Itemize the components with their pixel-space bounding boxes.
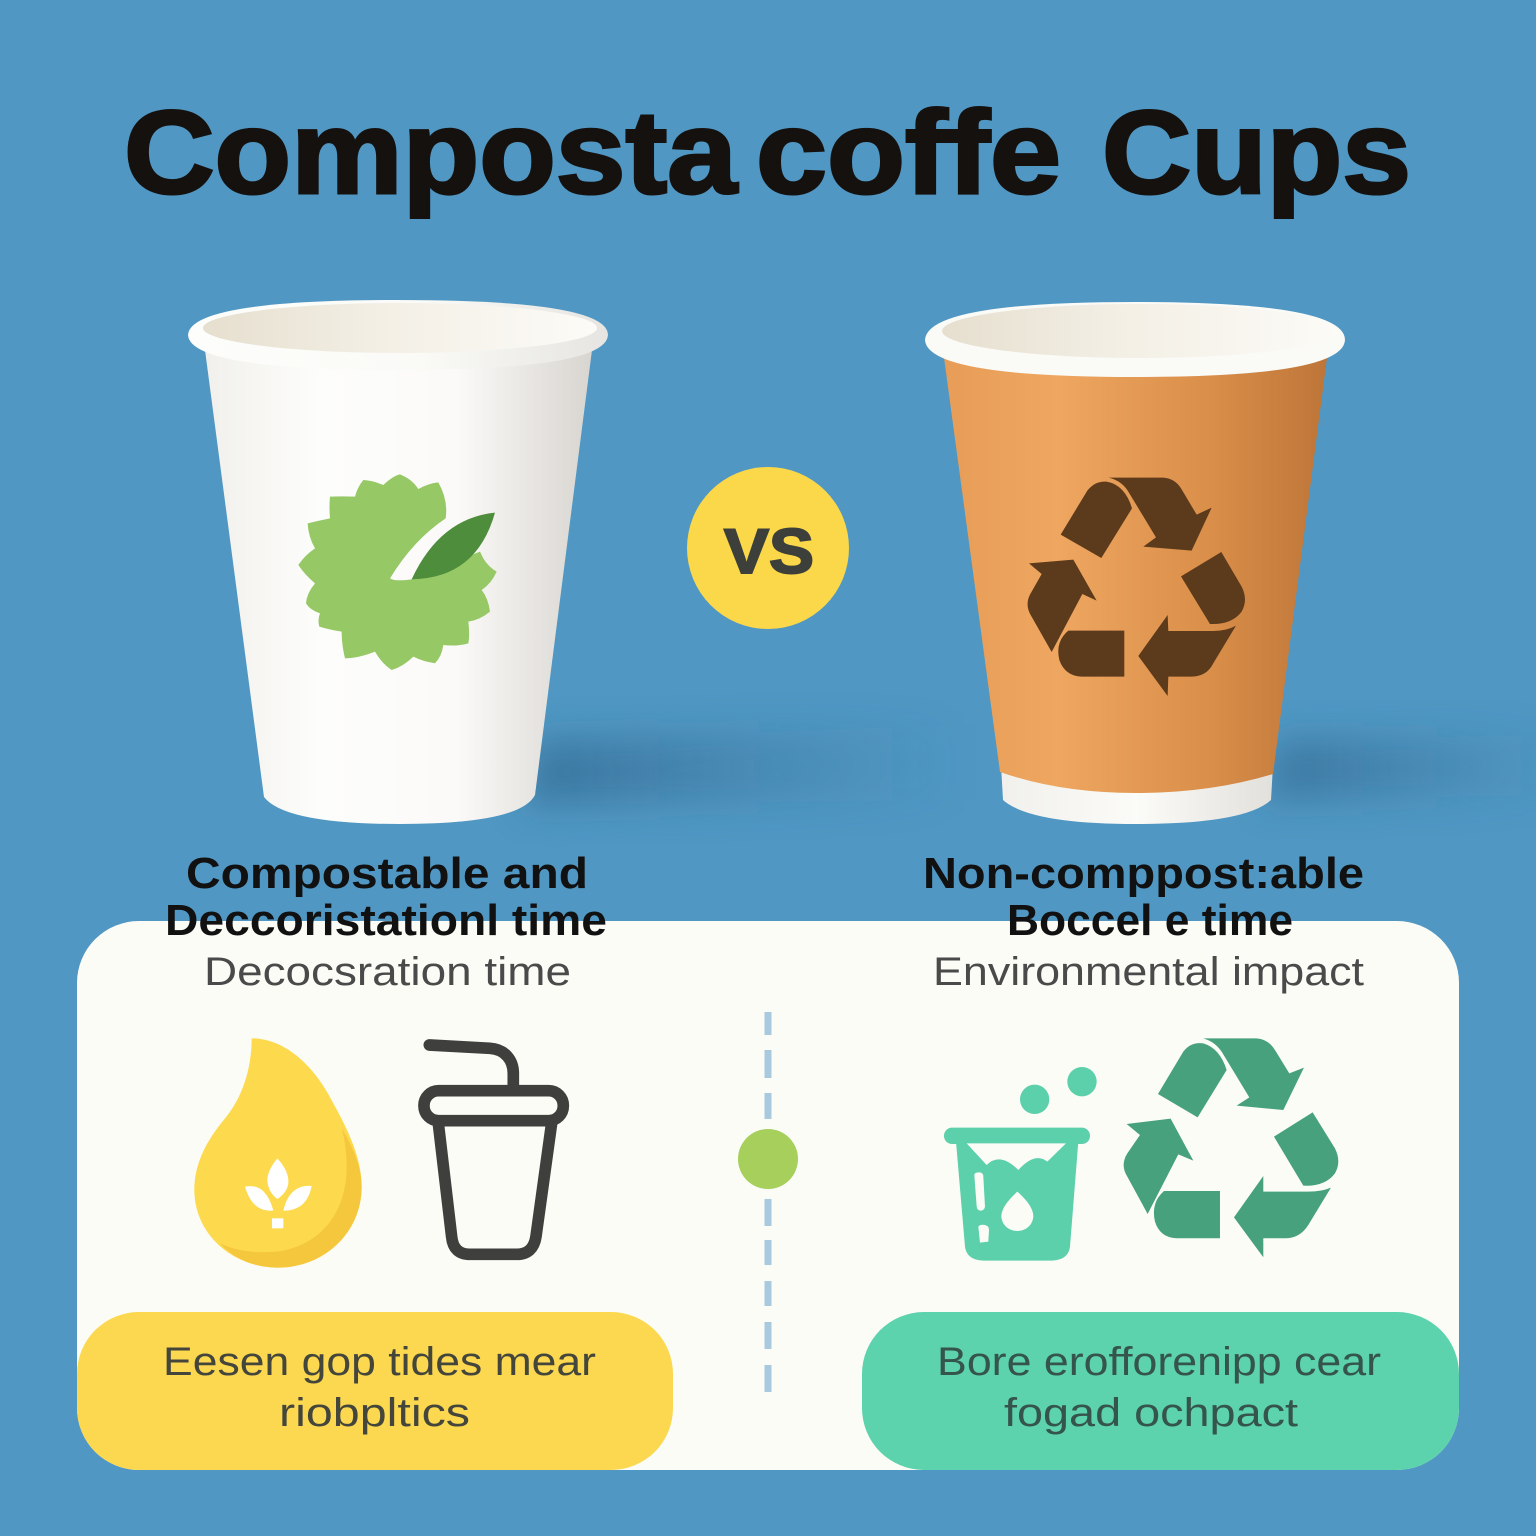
title: Cups bbox=[1102, 87, 1411, 219]
divider dot bbox=[738, 1129, 798, 1189]
right non-compostable kraft cup bbox=[925, 302, 1345, 824]
left subheading: Decocsration time bbox=[204, 950, 571, 994]
title bbox=[124, 87, 1411, 219]
VS badge bbox=[687, 467, 849, 629]
left cup rim bbox=[188, 300, 608, 370]
yellow callout: riobpltics bbox=[279, 1391, 470, 1435]
right cup body bbox=[943, 350, 1328, 793]
right subheading: Environmental impact bbox=[933, 950, 1364, 994]
teal callout bbox=[862, 1312, 1459, 1470]
right cup base band bbox=[1001, 765, 1273, 824]
title: coffe bbox=[756, 87, 1061, 219]
yellow callout bbox=[77, 1312, 673, 1470]
right cup inner bbox=[942, 304, 1338, 358]
recycling symbol on cup bbox=[1028, 478, 1245, 696]
icon: yellow drop with sprout bbox=[194, 1038, 362, 1268]
title: Composta bbox=[124, 87, 738, 219]
green seal bbox=[298, 474, 497, 670]
right cup rim bbox=[925, 302, 1345, 377]
bottom comparison panel bbox=[77, 921, 1459, 1470]
dark leaf bbox=[412, 513, 495, 579]
right heading: Non-comppost:able bbox=[923, 849, 1364, 898]
left heading: Deccoristationl time bbox=[165, 896, 607, 945]
teal callout: Bore erofforenipp cear bbox=[937, 1340, 1381, 1384]
cup shadows bbox=[525, 725, 1536, 805]
icon: teal bin with bubbles bbox=[944, 1067, 1097, 1261]
left cup inner bbox=[203, 303, 597, 353]
teal callout: fogad ochpact bbox=[1004, 1391, 1298, 1435]
icon: outlined cup with straw bbox=[424, 1045, 563, 1254]
yellow callout: Eesen gop tides mear bbox=[163, 1340, 596, 1384]
right heading bbox=[923, 849, 1364, 945]
left heading bbox=[165, 849, 607, 945]
compostable seal icon bbox=[298, 474, 497, 670]
divider bbox=[738, 1012, 798, 1392]
icon: green recycling symbol bbox=[1124, 1038, 1338, 1257]
left cup body bbox=[205, 350, 592, 824]
VS badge: VS bbox=[724, 517, 814, 587]
right heading: Boccel e time bbox=[1007, 896, 1293, 945]
left compostable white cup bbox=[188, 300, 608, 824]
left heading: Compostable and bbox=[186, 849, 588, 898]
